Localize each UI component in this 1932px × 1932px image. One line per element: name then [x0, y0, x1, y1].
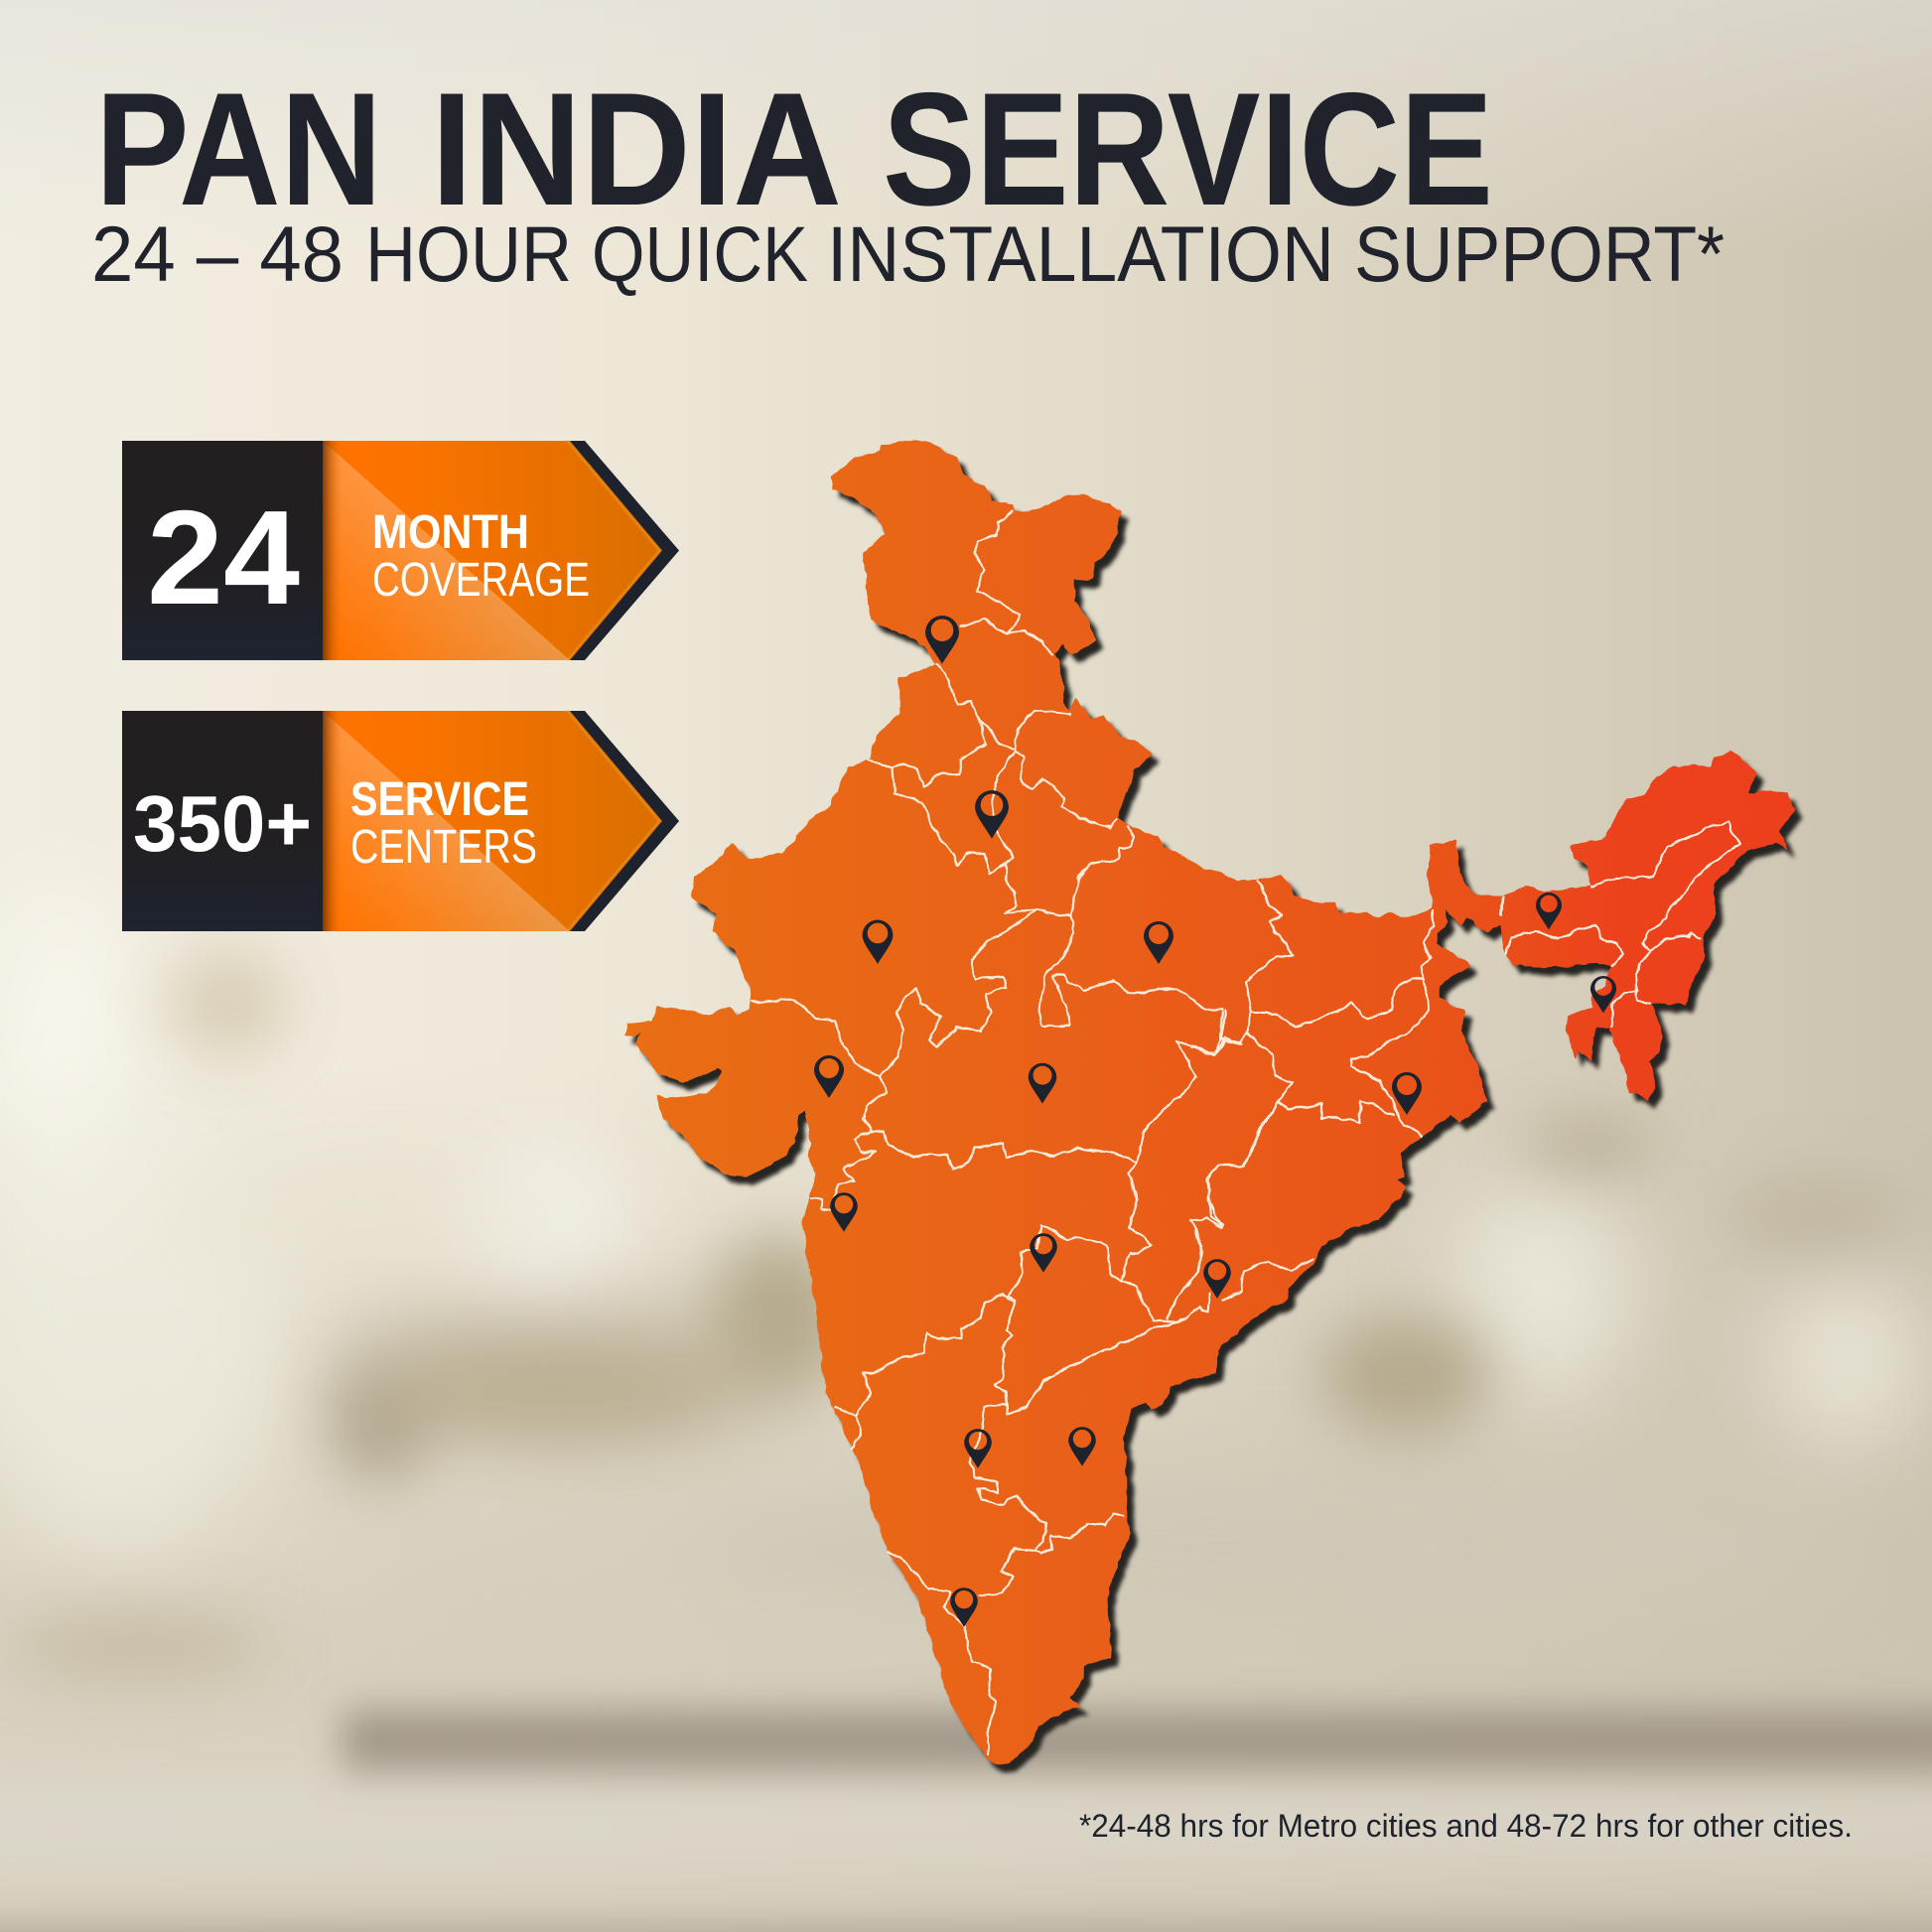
pin: Maharashtra east	[1030, 1233, 1057, 1273]
pin: Karnataka	[964, 1429, 992, 1468]
title: INDIA	[431, 60, 842, 239]
pin: West Bengal	[1392, 1072, 1422, 1115]
number: 24: 24	[147, 483, 300, 632]
map of India with state borders	[625, 441, 1793, 1763]
pin: Punjab	[925, 616, 959, 664]
pin: Andhra Pradesh	[1068, 1427, 1096, 1466]
title	[95, 60, 1493, 239]
pin: Kerala	[950, 1587, 978, 1627]
subtitle	[91, 209, 1725, 298]
label: service centers: SERVICE	[350, 773, 529, 826]
subtitle: QUICK	[592, 209, 808, 298]
pin: Uttar Pradesh	[1144, 921, 1173, 964]
subtitle: HOUR	[365, 209, 572, 298]
subtitle: SUPPORT*	[1354, 209, 1725, 298]
pin: Gujarat	[814, 1055, 844, 1098]
pin: Delhi	[975, 790, 1009, 839]
badge: 24 month coverage	[122, 441, 679, 660]
pin: Madhya Pradesh	[1029, 1063, 1056, 1104]
label: month coverage: COVERAGE	[372, 554, 590, 607]
pin: Maharashtra west	[830, 1192, 858, 1232]
label: month coverage: MONTH	[372, 506, 529, 559]
pin: Assam	[1536, 893, 1562, 929]
subtitle: 24 – 48	[91, 209, 344, 298]
map pins	[814, 616, 1616, 1627]
badge: 350+ service centers	[122, 711, 679, 931]
map outline	[625, 441, 1793, 1763]
label: service centers	[350, 773, 537, 874]
title: SERVICE	[883, 60, 1493, 239]
pin: Chhattisgarh	[1203, 1259, 1231, 1299]
number: 350+: 350+	[133, 779, 312, 868]
footnote: *24-48 hrs for Metro cities and 48-72 hrs for other cities.	[1079, 1808, 1853, 1844]
pin: Tripura	[1590, 976, 1616, 1013]
pin: Rajasthan	[863, 920, 893, 964]
state borders	[753, 511, 1740, 1754]
subtitle: INSTALLATION	[827, 209, 1334, 298]
title: PAN	[95, 60, 382, 239]
label: service centers: CENTERS	[350, 821, 537, 874]
label: month coverage	[372, 506, 590, 607]
